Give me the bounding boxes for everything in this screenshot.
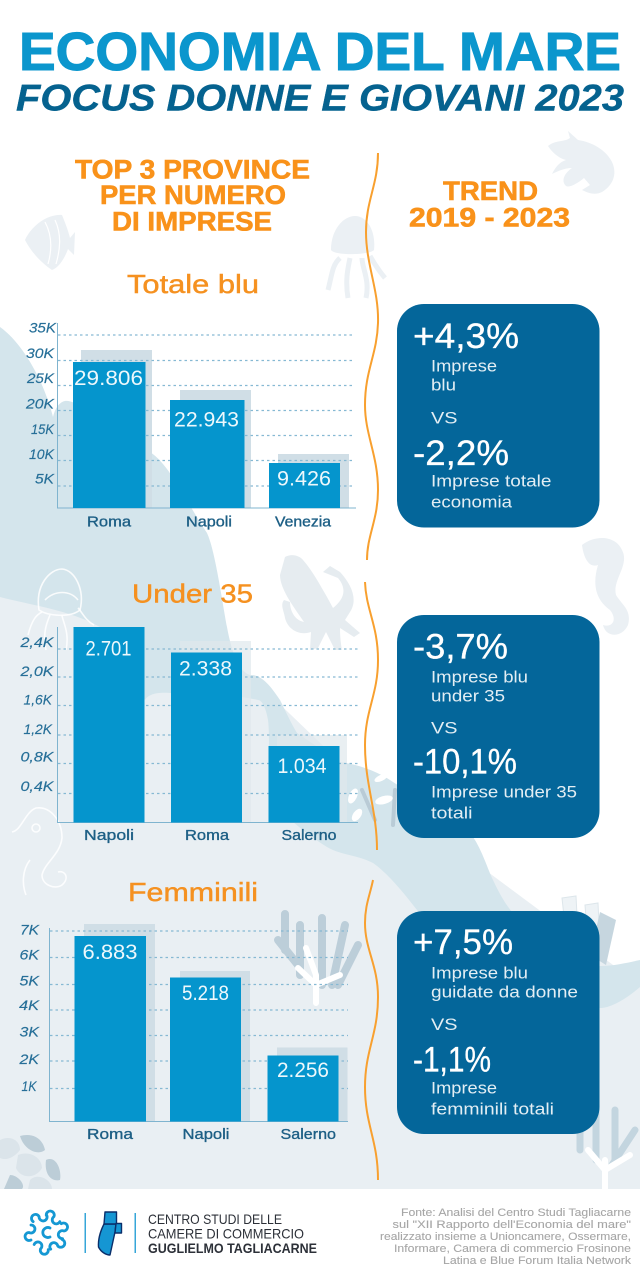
subtitle: FOCUS DONNE E GIOVANI 2023 (16, 78, 624, 118)
trend card: under 35 (397, 615, 600, 838)
bar chart: femminili: 5.218 (182, 982, 229, 1005)
trend card: under 35: VS (431, 718, 458, 738)
heading: trend: TREND (443, 176, 538, 206)
bar chart: under 35: 2.701 (86, 638, 132, 660)
heading: top 3 province: PER NUMERO (100, 180, 286, 210)
bar chart: totale blu (25, 320, 356, 530)
text: centro studi: CAMERE DI COMMERCIO (148, 1226, 304, 1242)
icon: jellyfish top (328, 216, 385, 298)
bar chart: totale blu: 22.943 (174, 408, 239, 432)
title: ECONOMIA DEL MARE (19, 22, 621, 82)
bar chart: under 35: 0,4K (20, 778, 54, 794)
bar chart: under 35: 1,2K (24, 721, 53, 737)
text: source: Latina e Blue Forum Italia Network (443, 1255, 632, 1267)
icon: tube coral (562, 896, 616, 965)
bar chart: under 35: Salerno (282, 827, 336, 844)
bar chart: under 35: 2,4K (19, 634, 54, 650)
bar chart: femminili: 4K (19, 997, 40, 1013)
trend card: femminili: femminili totali (431, 1100, 554, 1118)
bar chart: under 35: 1.034 (278, 755, 327, 778)
bar chart: under 35: 1,6K (24, 692, 53, 708)
icon: branching coral center (278, 914, 358, 1003)
icon: squid (280, 555, 360, 650)
bar chart: totale blu: 15K (31, 421, 55, 437)
icon: seahorse left (12, 808, 66, 895)
bar chart: femminili: 6K (20, 946, 40, 962)
divider: wavy line bottom (365, 880, 378, 1180)
trend card: totale blu: Imprese totale (431, 472, 552, 490)
bar chart: under 35: 0,8K (20, 748, 54, 764)
trend card: totale blu: Imprese (431, 356, 497, 376)
bar chart: totale blu: 35K (29, 320, 57, 336)
heading: top 3 province: TOP 3 PROVINCE (75, 154, 310, 184)
trend card: totale blu: VS (431, 408, 458, 428)
icon: small coral middle (346, 772, 395, 825)
text: source: sul "XII Rapporto dell'Economia del mare" (392, 1219, 631, 1231)
text: source: realizzato insieme a Unioncamere, Ossermare, (380, 1231, 631, 1243)
bar chart: totale blu: Napoli (186, 514, 232, 530)
icon: tagliacarne logo (98, 1212, 122, 1255)
heading: trend: 2019 - 2023 (409, 202, 570, 232)
trend card: under 35: -10,1% (413, 742, 517, 782)
trend card: femminili: Imprese (431, 1078, 497, 1098)
trend card: totale blu: +4,3% (413, 317, 519, 356)
divider: wavy line middle (365, 582, 378, 850)
trend card: under 35: totali (431, 804, 472, 822)
bar chart: femminili (18, 922, 348, 1143)
trend card: femminili: +7,5% (413, 923, 513, 962)
divider: logo right (134, 1213, 136, 1253)
text: source: Informare, Camera di commercio Frosinone (394, 1243, 631, 1255)
trend card: femminili: VS (431, 1015, 458, 1034)
bar chart: under 35 (19, 627, 358, 844)
bar chart: totale blu: Roma (87, 514, 132, 530)
trend card: femminili: guidate da donne (431, 982, 578, 1002)
bar chart: totale blu: 9.426 (277, 468, 331, 490)
bar chart: totale blu: 10K (29, 446, 55, 462)
heading: trend (409, 176, 570, 232)
trend card: under 35: Imprese under 35 (431, 782, 577, 802)
text: centro studi (148, 1211, 317, 1256)
bar chart: femminili: Napoli (182, 1126, 230, 1143)
bar chart: under 35: Roma (185, 827, 230, 844)
divider: logo left (84, 1213, 86, 1253)
bar chart: under 35: 2,0K (19, 663, 54, 679)
text: centro studi: GUGLIELMO TAGLIACARNE (148, 1240, 317, 1256)
icon: shrimp (548, 131, 614, 194)
bar chart: totale blu: 25K (26, 370, 55, 386)
bar chart: under 35: Napoli (84, 827, 134, 844)
trend card: under 35: Imprese blu (431, 668, 528, 686)
text: source: Fonte: Analisi del Centro Studi Tagliacarne (401, 1207, 631, 1219)
bar chart: totale blu: 20K (25, 396, 55, 412)
icon: camere di commercio swirl logo (25, 1210, 69, 1255)
icon: jellyfish left (28, 569, 94, 650)
trend card: femminili (397, 911, 600, 1134)
icon: fish (25, 215, 75, 270)
trend card: totale blu: -2,2% (413, 434, 509, 473)
bar chart: femminili: 2K (18, 1051, 40, 1067)
bar chart: femminili: 1K (22, 1078, 37, 1094)
trend card: totale blu (397, 304, 600, 528)
bar chart: totale blu: 5K (35, 470, 55, 486)
section heading: femminili: Femminili (128, 877, 258, 907)
trend card: totale blu: blu (431, 376, 456, 394)
bar chart: femminili: 6.883 (82, 941, 138, 964)
trend card: under 35: -3,7% (413, 628, 508, 666)
footer band (0, 1189, 640, 1280)
divider: wavy line top (365, 153, 378, 560)
bar chart: femminili: Salerno (280, 1126, 336, 1143)
bar chart: femminili: 5K (20, 972, 40, 988)
text: centro studi: CENTRO STUDI DELLE (148, 1211, 282, 1227)
bar chart: femminili: 2.256 (277, 1059, 329, 1082)
text: source (380, 1207, 632, 1267)
bar chart: under 35: 2.338 (179, 658, 232, 680)
bar chart: totale blu: Venezia (275, 514, 332, 530)
bar chart: totale blu: 30K (26, 345, 55, 361)
icon: coral bottom right (580, 1105, 635, 1189)
bar chart: femminili: 3K (20, 1024, 40, 1040)
trend card: femminili: -1,1% (413, 1040, 491, 1080)
trend card: femminili: Imprese blu (431, 964, 528, 982)
section heading: under 35: Under 35 (132, 578, 253, 608)
bar chart: femminili: 7K (20, 922, 40, 938)
section heading: totale blu: Totale blu (127, 269, 259, 299)
bar chart: femminili: Roma (87, 1126, 134, 1143)
icon: stone coral (0, 1135, 60, 1189)
heading: top 3 province: DI IMPRESE (112, 206, 272, 236)
icon: seahorse right (582, 538, 629, 635)
bar chart: totale blu: 29.806 (74, 367, 143, 390)
heading: top 3 province (75, 154, 310, 236)
trend card: totale blu: economia (431, 492, 513, 512)
trend card: under 35: under 35 (431, 686, 505, 706)
